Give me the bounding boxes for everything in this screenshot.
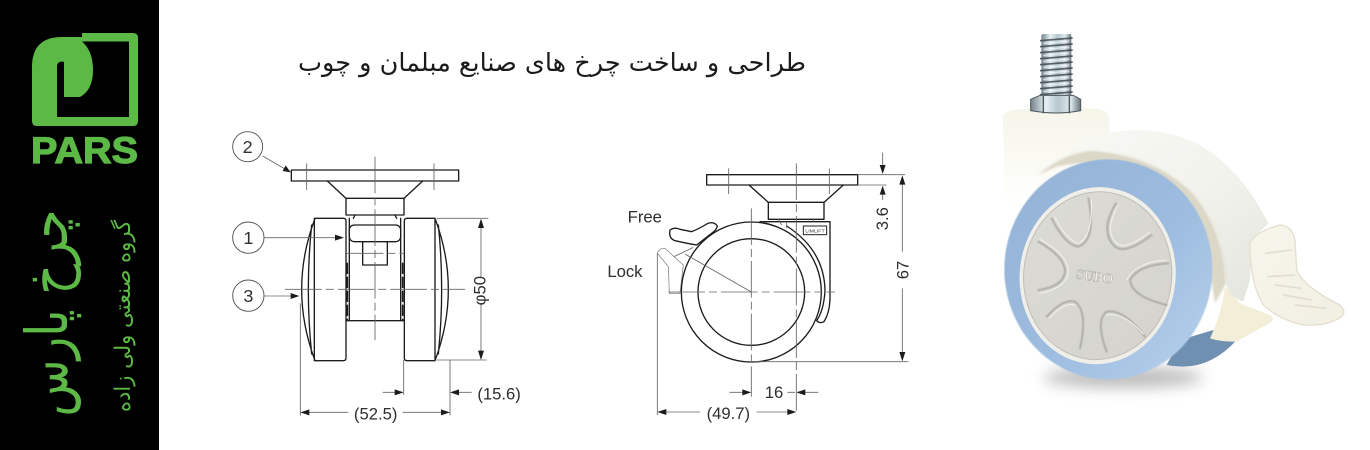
- mounting plate: [707, 168, 858, 219]
- threaded bolt: [1031, 34, 1081, 113]
- hub brand mark: SUPO: [1075, 268, 1114, 288]
- housing: [1040, 130, 1268, 302]
- dimension: 15.6: (15.6): [477, 384, 521, 403]
- left wheel: [302, 218, 346, 361]
- mounting plate: [291, 163, 459, 215]
- housing inner shade: [1038, 151, 1226, 303]
- centre lines: [668, 208, 835, 397]
- dimension: 15.6: [383, 360, 521, 415]
- hub embossed spokes: [1038, 198, 1168, 352]
- dimension: 3.6: [858, 153, 905, 230]
- brake lever: [1250, 225, 1344, 325]
- back wheel: [1167, 330, 1237, 367]
- label: Lock: Lock: [607, 262, 643, 281]
- right wheel: [404, 218, 448, 361]
- dimension: 16: 16: [765, 383, 783, 402]
- chart: front view technical drawing: [233, 132, 521, 423]
- swivel bracket: [760, 219, 830, 323]
- panel: black sidebar: [0, 0, 159, 450]
- floor shadow: [1043, 367, 1203, 387]
- axle housing: [346, 215, 404, 321]
- dimension: 52.5: [300, 303, 450, 423]
- callout 2: [233, 132, 291, 172]
- dimension: 49.7: [657, 253, 796, 423]
- brake lever: lock position: [657, 248, 683, 293]
- label: Free: Free: [628, 207, 662, 226]
- dimension: 3.6: 3.6: [873, 207, 892, 230]
- dimension: 67: 67: [893, 261, 912, 279]
- caster body: [1003, 34, 1273, 387]
- brand name vertical: چرخ پارس: [13, 210, 82, 416]
- illustration: caster wheel photo: [1003, 34, 1344, 387]
- dimension: diameter 50: φ50: [470, 276, 489, 305]
- callout 1: 1: [243, 228, 253, 248]
- logo wordmark: PARS: [31, 130, 138, 171]
- post: [1003, 108, 1109, 207]
- tyre: [1004, 159, 1212, 379]
- dimension: 49.7: (49.7): [707, 404, 750, 423]
- lower bracket: [1210, 287, 1273, 342]
- brake lever: free position: [670, 223, 717, 245]
- company name vertical: گروه صنعتی ولی زاده: [110, 219, 136, 412]
- callout 2: 2: [243, 137, 253, 157]
- callout 1: [233, 222, 344, 253]
- dimension: 16: [729, 383, 818, 402]
- dimension: 52.5: (52.5): [354, 404, 397, 423]
- dimension: diameter 50: [437, 218, 489, 360]
- dimension: 67: [753, 175, 912, 362]
- swivel bracket: LIMLIFT: [805, 228, 825, 234]
- callout 3: 3: [243, 286, 253, 306]
- icon: Pars logo mark: [32, 33, 138, 126]
- wheel hub: [1011, 179, 1185, 372]
- chart: side view technical drawing: [607, 153, 912, 423]
- callout 3: [233, 280, 299, 311]
- title: طراحی و ساخت چرخ های صنایع مبلمان و چوب: [298, 48, 806, 78]
- wheel: [681, 222, 821, 362]
- centre lines: [285, 157, 465, 340]
